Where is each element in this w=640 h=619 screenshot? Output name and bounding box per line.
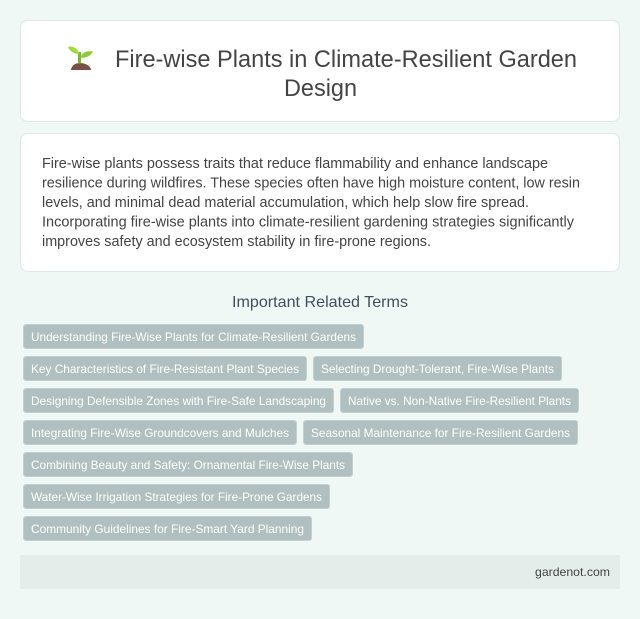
tag [24,452,352,476]
tag [24,324,364,348]
tag: Native vs. Non-Native Fire-Resilient Plants [348,394,571,408]
title [115,46,577,102]
icon: seedling [68,46,93,70]
title panel [20,20,620,122]
panel: description [20,134,620,272]
description text: Fire-wise plants possess traits that reduce flammability and enhance landscape [42,156,548,172]
title: Design [284,75,357,102]
description text: resilience during wildfires. These species often have high moisture content, low resin [42,176,580,192]
tag: Seasonal Maintenance for Fire-Resilient Gardens [311,426,570,440]
footer [20,555,620,589]
tag: Key Characteristics of Fire-Resistant Plant Species [31,362,299,376]
description text: levels, and minimal dead material accumulation, which help slow fire spread. [42,195,529,211]
tag [24,356,306,380]
description text: improves safety and ecosystem stability in fire-prone regions. [42,234,431,250]
tag [314,356,562,380]
tag [304,420,578,444]
tag [24,484,330,508]
tag list [24,324,578,540]
footer text: source: gardenot.com [535,565,610,579]
tag [24,420,296,444]
description text: Incorporating fire-wise plants into climate-resilient gardening strategies significantly [42,214,575,230]
tag [340,388,578,412]
heading: related terms: Important Related Terms [232,294,408,311]
description text [42,156,580,250]
tag: Understanding Fire-Wise Plants for Climate-Resilient Gardens [31,330,356,344]
tag: Water-Wise Irrigation Strategies for Fire-Prone Gardens [31,490,322,504]
tag: Community Guidelines for Fire-Smart Yard Planning [31,522,304,536]
tag: Designing Defensible Zones with Fire-Safe Landscaping [31,394,326,408]
title: Fire-wise Plants in Climate-Resilient Garden [115,46,577,73]
tag: Combining Beauty and Safety: Ornamental Fire-Wise Plants [31,458,345,472]
tag: Integrating Fire-Wise Groundcovers and Mulches [31,426,289,440]
tag [24,516,312,540]
tag: Selecting Drought-Tolerant, Fire-Wise Plants [321,362,554,376]
tag [24,388,334,412]
